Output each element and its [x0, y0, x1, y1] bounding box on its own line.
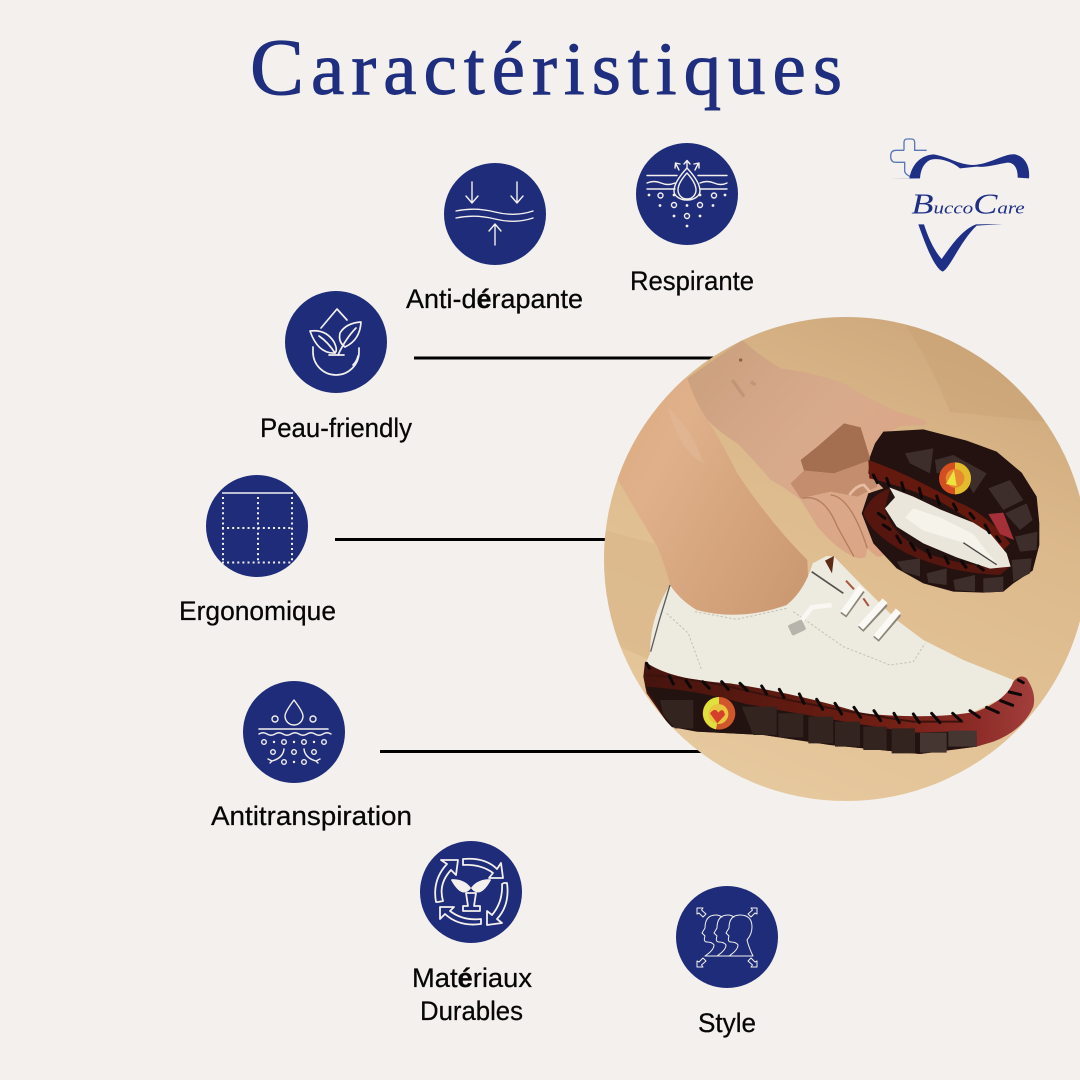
icon: ergonomic grid [206, 475, 308, 577]
leg and hand [618, 340, 926, 615]
title: Caractéristiques [250, 22, 842, 112]
shoe upper [645, 556, 1020, 718]
held shoe emblem [939, 462, 971, 494]
sole [643, 662, 1034, 754]
held shoe [849, 429, 1039, 593]
label: Matériaux Durables [412, 963, 532, 1026]
finger ring [849, 485, 871, 495]
icon: breathable [636, 143, 738, 245]
label: Ergonomique: Ergonomique [179, 596, 336, 626]
icon: durable materials [420, 841, 522, 943]
hand [687, 340, 926, 558]
logo: BuccoCare [888, 139, 1029, 272]
sole emblem [703, 697, 735, 730]
logo cross [891, 139, 927, 177]
leg [618, 378, 808, 615]
outer sole [862, 429, 1039, 593]
label: Antitranspiration: Antitranspiration [211, 801, 412, 831]
label: Style: Style [698, 1008, 756, 1038]
icon: skin friendly [285, 291, 387, 393]
worn shoe [643, 556, 1034, 754]
icon: anti-slip [444, 163, 546, 265]
connector line: Antitranspiration [380, 750, 702, 753]
icon: antiperspirant [243, 681, 345, 783]
connector line: Ergonomique [335, 538, 607, 541]
logo wordmark: BuccoCare [911, 188, 1025, 220]
label: Peau-friendly: Peau-friendly [260, 413, 412, 443]
infographic canvas [181, 40, 1080, 1038]
product photo: shoes in circle [600, 310, 1080, 810]
label: Matériaux Durables: Matériaux [412, 963, 532, 993]
label: Respirante: Respirante [630, 266, 754, 296]
label: Anti-dérapante: Anti-dérapante [406, 284, 583, 314]
logo tooth root [918, 224, 1003, 272]
label: Matériaux Durables: Durables [420, 996, 523, 1026]
insole [885, 487, 1011, 569]
stitches [647, 663, 1023, 723]
icon: style [676, 886, 778, 988]
logo tooth crown [888, 154, 1029, 179]
connector line: Peau-friendly [414, 356, 714, 360]
